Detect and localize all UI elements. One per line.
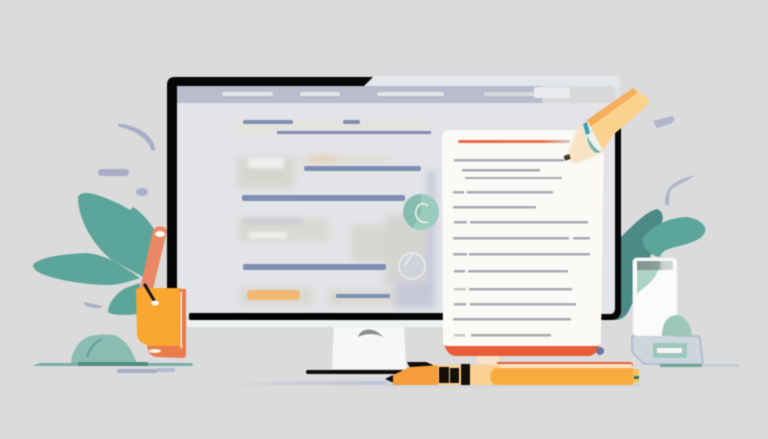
plant: left leaves: [33, 193, 155, 315]
pencil: top right: [563, 88, 649, 164]
screen blurred content blocks: [235, 122, 435, 308]
monitor bottom frame: [189, 313, 444, 320]
book: left: [136, 226, 186, 358]
ground shadow lines: [200, 381, 643, 387]
document heading bar: [458, 140, 570, 143]
screen orange bar: [247, 290, 300, 300]
monitor top strip: [374, 76, 620, 86]
screen text bars: [242, 120, 431, 298]
document: [442, 130, 604, 356]
tablet body: [633, 258, 677, 336]
decorative squiggles: left: [84, 124, 155, 308]
monitor frame: [167, 77, 374, 289]
tablet stand: [632, 336, 703, 364]
ground line: left: [32, 362, 193, 373]
monitor chin: [187, 320, 447, 327]
monitor stand: [306, 322, 406, 374]
plant: right leaves: [614, 209, 705, 320]
document red base: [443, 340, 600, 356]
monitor: [167, 76, 621, 374]
document dot: [596, 347, 604, 355]
screen header bar: [177, 86, 616, 103]
book ribbon: [140, 226, 167, 289]
ground line: right: [660, 364, 740, 367]
book pen mark: [145, 285, 155, 302]
monitor screen: [177, 86, 620, 316]
screen circle icon: [399, 194, 439, 279]
document text lines: [453, 159, 590, 336]
mound: left: [71, 335, 137, 364]
tablet mound: [662, 315, 692, 336]
decorative squiggles: right: [653, 116, 695, 205]
tablet label: [653, 343, 687, 358]
screen highlight blocks: [243, 158, 303, 238]
document page: [442, 130, 604, 346]
pencil: bottom: [385, 356, 639, 385]
book back: [147, 340, 186, 358]
monitor right frame: [600, 128, 621, 320]
tablet: right: [632, 258, 740, 367]
book cover: [136, 288, 186, 346]
